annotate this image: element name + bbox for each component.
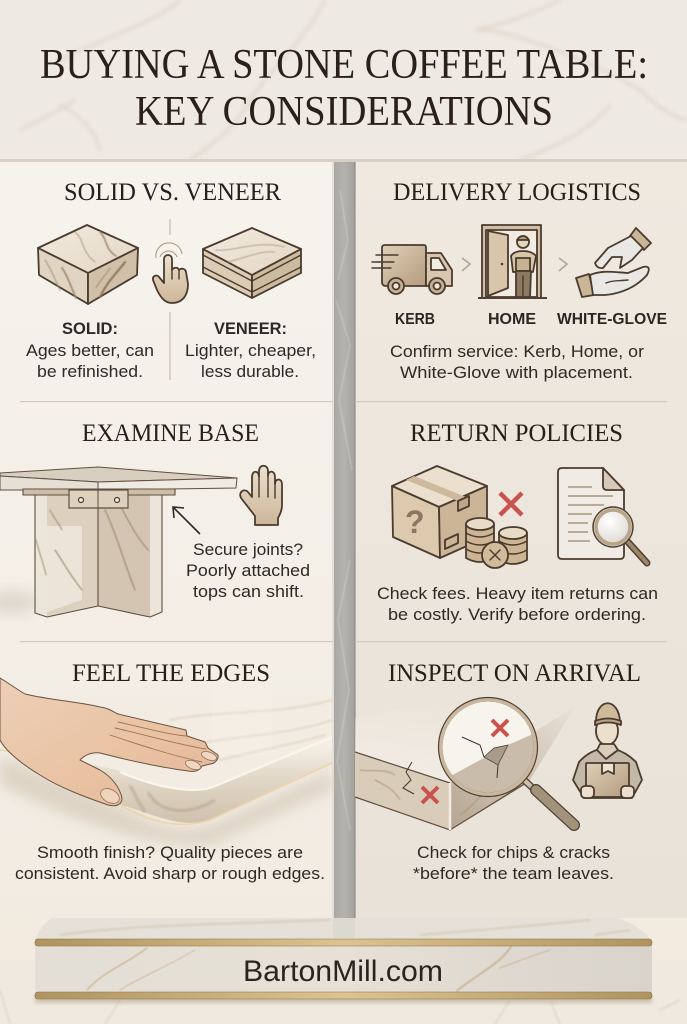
bottom marble strip [0, 960, 687, 1024]
icon: delivery person [573, 703, 642, 798]
arrow: home to white-glove [559, 258, 567, 271]
text: inspection note: *before* the team leaves. [413, 865, 614, 883]
marble plinth with website [35, 918, 652, 999]
text: edges note: Smooth finish? Quality pieces are [37, 844, 303, 862]
text: delivery note [390, 343, 645, 382]
icon: open hand [240, 466, 282, 525]
left column background [0, 162, 333, 918]
icon: coin stacks [466, 518, 527, 568]
arrow: points to joint [173, 507, 200, 534]
website name: BartonMill.com [243, 955, 443, 988]
label: veneer [185, 320, 316, 381]
heading: delivery logistics: DELIVERY LOGISTICS [393, 177, 641, 206]
text: joints note: Secure joints? [193, 541, 303, 559]
text: joints note: tops can shift. [193, 583, 304, 601]
heading: inspect on arrival: INSPECT ON ARRIVAL [388, 658, 641, 687]
text: returns note: be costly. Verify before ordering. [388, 606, 646, 624]
text: inspection note: Check for chips & cracks [417, 844, 610, 862]
icon: white-glove hands [576, 228, 651, 297]
icon: red cross [500, 493, 522, 515]
icon: tapping hand [153, 219, 188, 303]
text: inspection note [413, 844, 614, 883]
title: BUYING A STONE COFFEE TABLE: [40, 42, 648, 88]
illustration: table base [0, 467, 237, 617]
text: edges note: consistent. Avoid sharp or rough edges. [15, 865, 325, 883]
panel: examine base [0, 418, 310, 617]
heading: feel the edges: FEEL THE EDGES [72, 658, 270, 687]
title: KEY CONSIDERATIONS [135, 89, 553, 135]
panel: return policies [377, 418, 658, 624]
text: delivery note: Confirm service: Kerb, Home, or [390, 343, 645, 361]
right column background [355, 162, 687, 918]
delivery tier labels: WHITE-GLOVE [557, 311, 667, 328]
panel: feel the edges [0, 658, 332, 883]
icon: doorway with courier [478, 225, 547, 298]
central marble spine [332, 162, 356, 918]
label: veneer: less durable. [201, 363, 299, 381]
text: joints note [186, 541, 310, 601]
heading: examine base: EXAMINE BASE [82, 418, 259, 447]
header marble band [0, 0, 687, 162]
title [40, 42, 648, 135]
icon: red cross in lens [492, 720, 508, 736]
panel: inspect on arrival [355, 658, 642, 883]
icon: document with magnifier [558, 468, 647, 563]
delivery tier labels: HOME [488, 311, 536, 328]
label: solid: Ages better, can [26, 342, 154, 360]
delivery tier labels [395, 311, 667, 328]
icon: magnifying glass over crack [438, 698, 574, 825]
label: veneer: VENEER: [214, 320, 287, 338]
label: veneer: Lighter, cheaper, [185, 342, 316, 360]
icon: red cross on edge [422, 787, 438, 803]
divider: solid and veneer [169, 312, 171, 380]
icon: cardboard box: ? [405, 504, 425, 540]
icon: veneer block [203, 228, 301, 298]
arrow: kerb to home [462, 258, 470, 271]
icon: solid stone block [38, 225, 138, 304]
icon: delivery truck [372, 245, 452, 294]
label: solid [26, 320, 154, 381]
illustration: hand on table edge [0, 678, 332, 845]
heading: return policies: RETURN POLICIES [410, 418, 623, 447]
text: delivery note: White-Glove with placement. [400, 364, 633, 382]
text: returns note [377, 585, 658, 624]
text: edges note [15, 844, 325, 883]
heading: solid vs veneer: SOLID VS. VENEER [64, 177, 281, 206]
label: solid: SOLID: [62, 320, 118, 338]
panel: delivery logistics [372, 177, 667, 382]
text: returns note: Check fees. Heavy item returns can [377, 585, 658, 603]
text: joints note: Poorly attached [186, 562, 310, 580]
icon: cardboard box [392, 466, 487, 558]
label: solid: be refinished. [37, 363, 143, 381]
panel: solid vs veneer [26, 177, 316, 381]
delivery tier labels: KERB [395, 311, 435, 328]
illustration: chipped table corner [355, 700, 575, 830]
